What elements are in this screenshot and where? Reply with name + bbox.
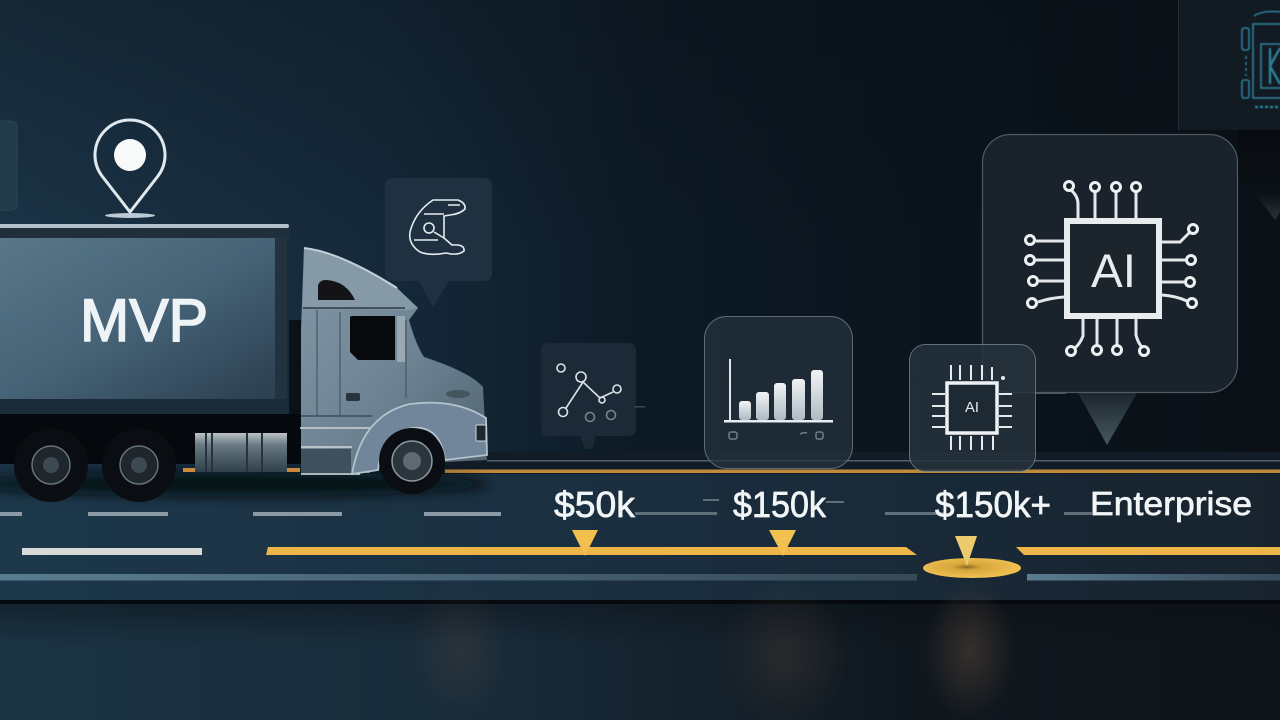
milestone labels: Enterprise (1090, 485, 1252, 522)
milestone labels: $150k (733, 484, 827, 525)
orange progress line upper (445, 470, 1280, 473)
floor reflections (0, 580, 1280, 720)
label: MVP: MVP (80, 287, 208, 354)
front wheel (379, 428, 445, 494)
callout: bar chart card (704, 316, 852, 468)
icon: small chip: AI (965, 399, 979, 416)
chassis (0, 414, 305, 464)
truck (0, 224, 490, 502)
milestone disc (923, 558, 1021, 578)
ground shadow (0, 472, 490, 496)
icon: location pin (95, 120, 165, 218)
callout: small chip card (910, 344, 1066, 472)
white lane marking (22, 548, 202, 555)
callout: engine part icon (385, 178, 492, 307)
callout: large AI chip card (982, 134, 1238, 445)
road (0, 452, 1280, 605)
fender (352, 403, 487, 474)
milestone labels: $50k (554, 484, 636, 525)
fuel tank (183, 433, 300, 472)
rear wheel 1 (14, 428, 88, 502)
milestone labels: $150k+ (935, 484, 1051, 525)
orange progress line lower (266, 547, 1280, 555)
icon: engine part (410, 200, 465, 254)
rear wheel 2 (102, 428, 176, 502)
panel: left partial card (0, 121, 17, 210)
icon: blueprint device (1242, 12, 1280, 107)
tractor cab (300, 248, 487, 474)
milestone labels (554, 484, 1252, 525)
steps (300, 428, 370, 474)
bar chart (724, 359, 833, 439)
icon: AI chip (1026, 182, 1198, 356)
callout: network nodes icon (541, 343, 645, 449)
icon: network nodes (557, 364, 621, 422)
icon: small chip (932, 365, 1012, 450)
road lane dashes (0, 499, 1092, 516)
trailer (0, 224, 303, 416)
panel: top-right blueprint card (1178, 0, 1280, 220)
icon: AI chip: AI (1091, 244, 1136, 297)
milestone markers (572, 530, 977, 566)
road edge line (0, 574, 1280, 580)
